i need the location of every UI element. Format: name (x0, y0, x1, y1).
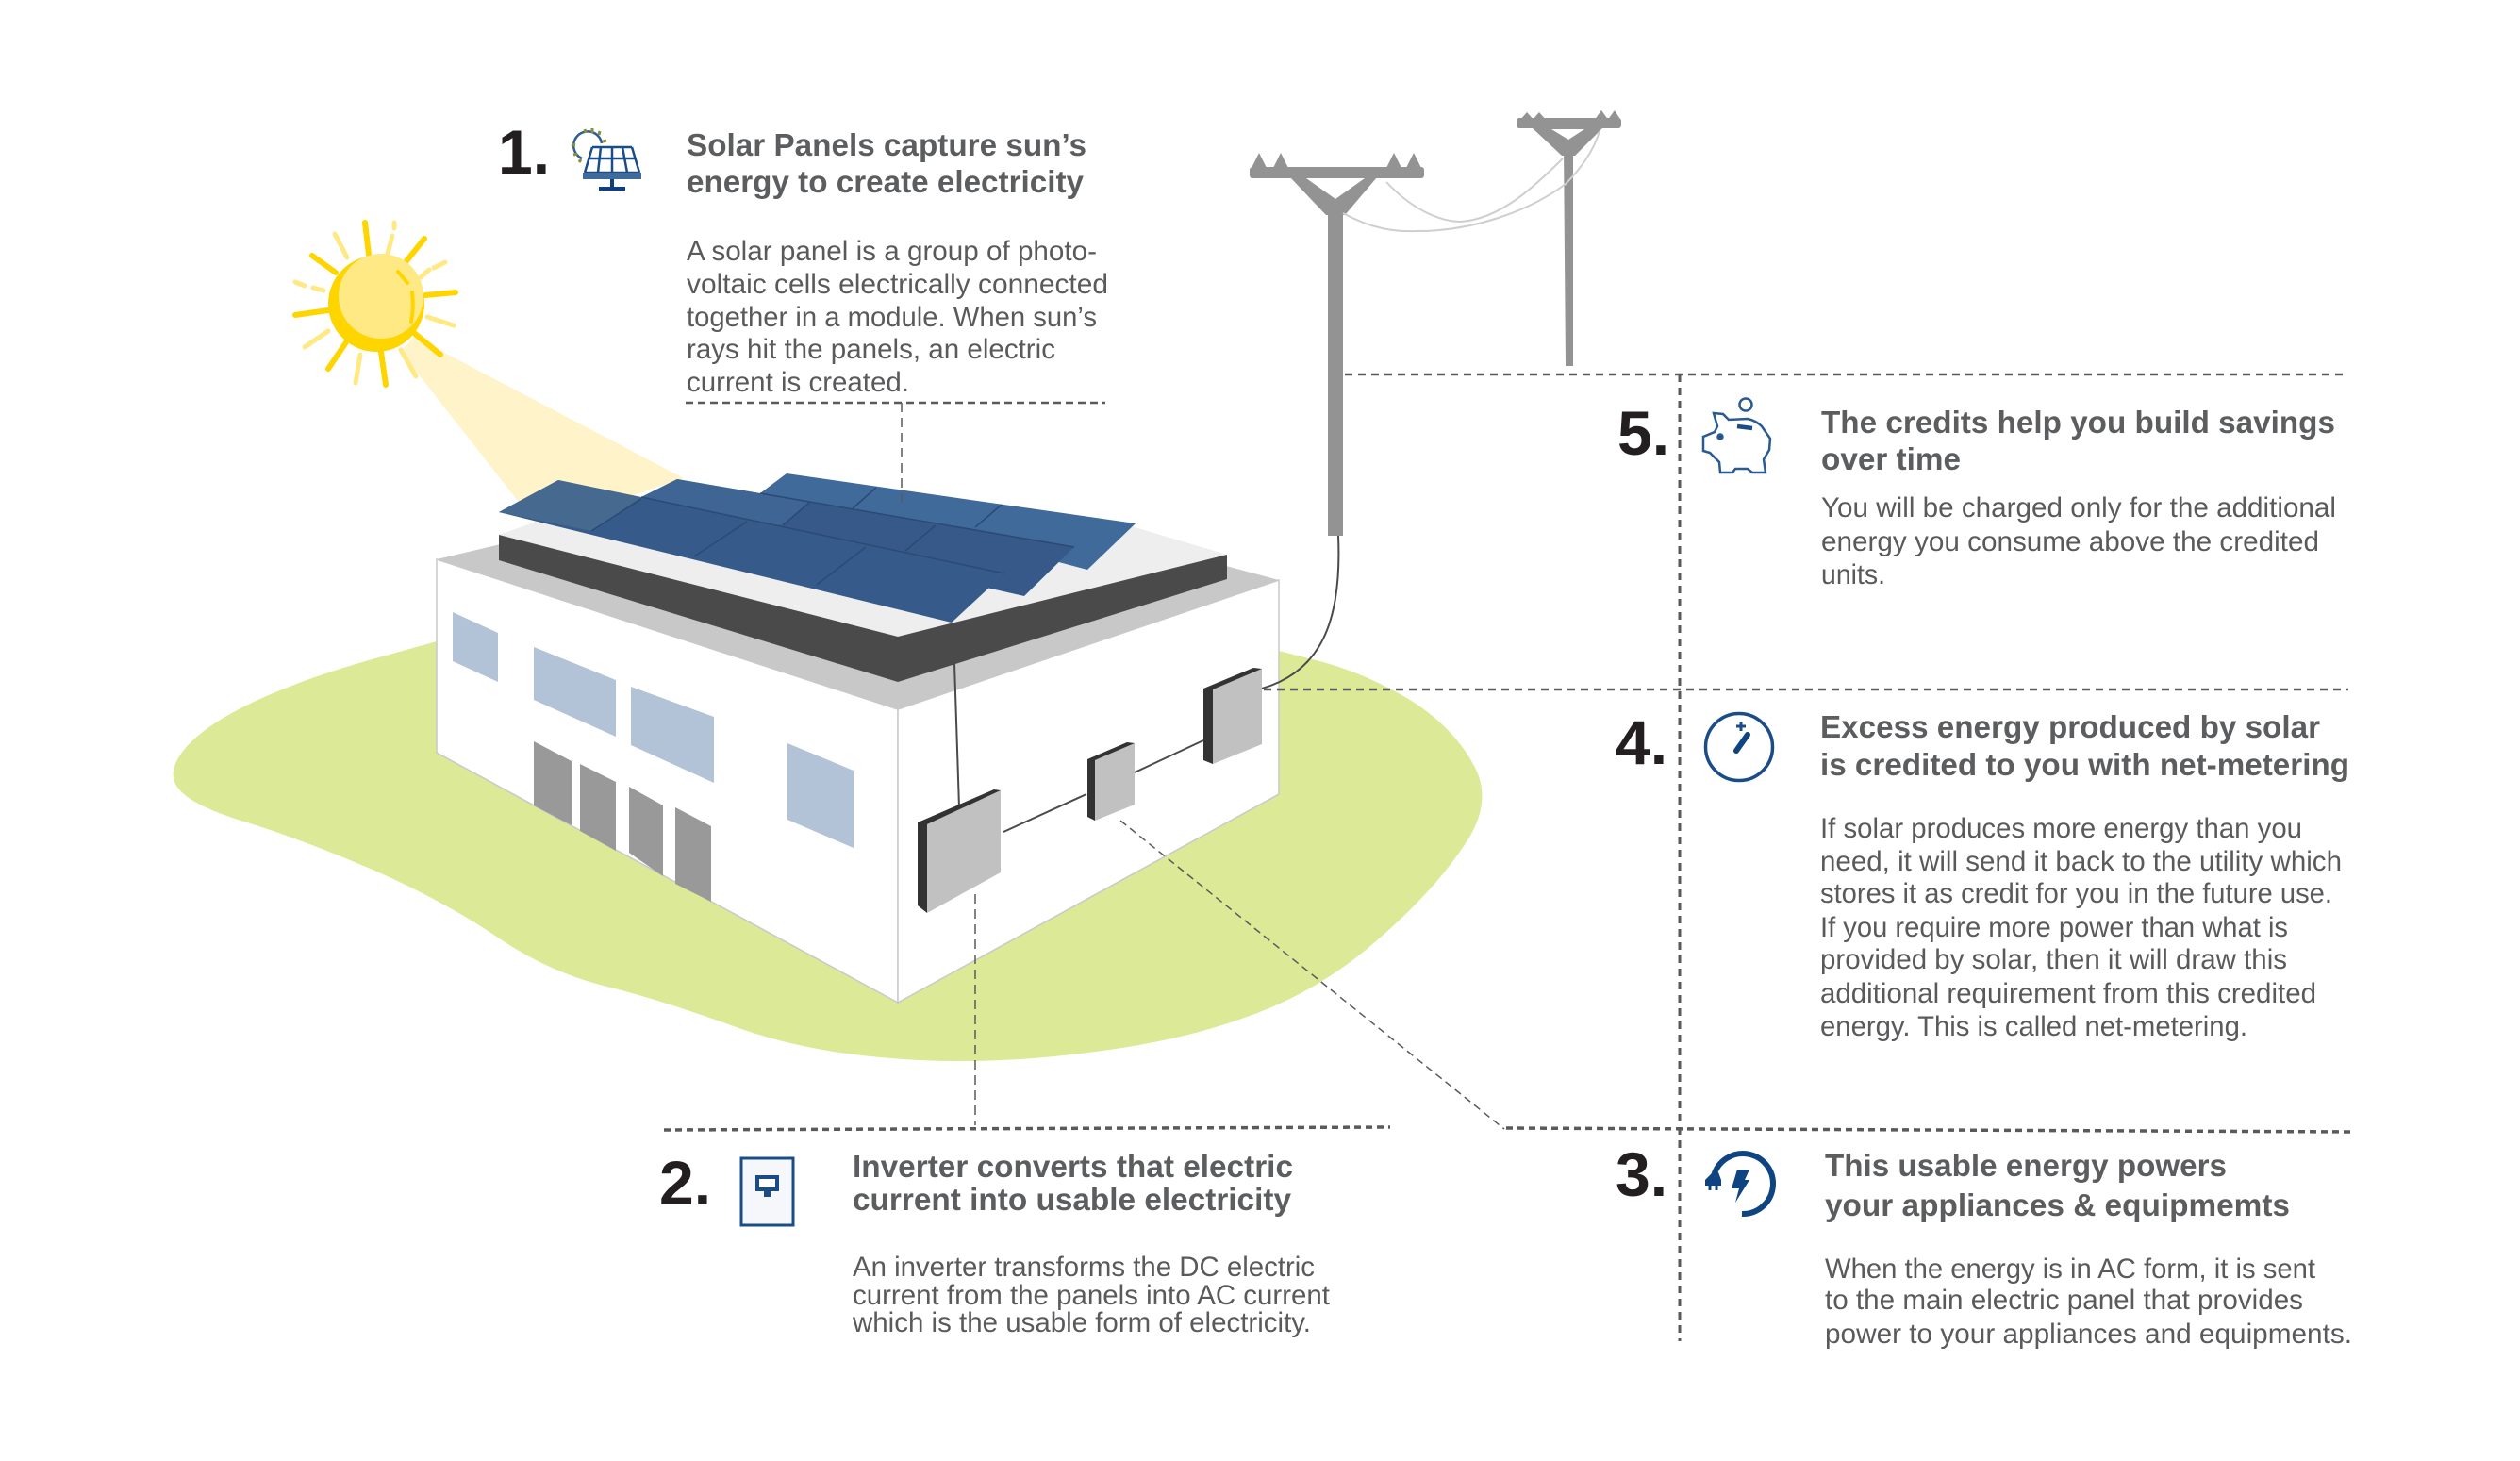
heading 1: energy to create electricity (687, 164, 1085, 199)
heading 3: your appliances & equipmemts (1825, 1187, 2290, 1222)
wiring between boxes (954, 536, 1338, 832)
body 3: When the energy is in AC form, it is sent (1825, 1253, 2316, 1285)
building (437, 505, 1279, 1003)
body 2: which is the usable form of electricity. (852, 1307, 1311, 1338)
sun (295, 223, 456, 385)
icon: inverter (741, 1158, 793, 1225)
body 1: current is created. (687, 367, 909, 398)
panel dividers (591, 488, 1074, 585)
body 1: voltaic cells electrically connected (687, 269, 1108, 300)
step 5 (1617, 398, 2336, 590)
body 4: additional requirement from this credited (1820, 978, 2316, 1009)
body 4 (1820, 813, 2342, 1042)
step 2 (659, 1148, 1331, 1338)
body 1: together in a module. When sun’s (687, 302, 1097, 333)
sun major rays (295, 223, 456, 385)
heading 3: This usable energy powers (1825, 1148, 2227, 1183)
faded panel corner (499, 480, 641, 531)
step 1 (498, 117, 1108, 398)
utility pole left (1250, 153, 1424, 536)
heading 4: Excess energy produced by solar (1820, 709, 2320, 744)
heading 4: is credited to you with net-metering (1820, 747, 2349, 782)
body 4: provided by solar, then it will draw this (1820, 944, 2287, 975)
step 3 (1616, 1139, 2352, 1350)
body 5 (1821, 492, 2336, 590)
sun pale rays (295, 223, 454, 383)
heading 3 (1825, 1148, 2290, 1222)
heading 5 (1821, 405, 2335, 476)
icon: piggy bank (1703, 398, 1770, 473)
body 1: rays hit the panels, an electric (687, 334, 1055, 365)
middle row first cell (641, 479, 809, 525)
icon: stopwatch (1705, 713, 1773, 781)
body 5: units. (1821, 559, 1885, 590)
heading 2: current into usable electricity (853, 1182, 1292, 1217)
body 1: A solar panel is a group of photo- (687, 236, 1097, 267)
grass ground blob (174, 641, 1482, 1061)
body 4: need, it will send it back to the utility which (1820, 846, 2342, 877)
number 4: 4. (1616, 707, 1667, 777)
back panel row (760, 473, 1136, 570)
body 5: You will be charged only for the additional (1821, 492, 2336, 523)
roof slab (437, 538, 1279, 709)
heading 5: over time (1821, 441, 1961, 476)
heading 4 (1820, 709, 2349, 782)
solar panels (499, 473, 1136, 623)
body 4: stores it as credit for you in the future use. (1820, 878, 2332, 909)
body 5: energy you consume above the credited (1821, 526, 2319, 557)
icon: plug with bolt (1705, 1154, 1773, 1214)
heading 1: Solar Panels capture sun’s (687, 127, 1086, 162)
heading 1 (687, 127, 1086, 199)
number 3: 3. (1616, 1139, 1667, 1209)
body 4: If you require more power than what is (1820, 912, 2288, 943)
middle panel row (641, 479, 1074, 596)
left wall (437, 559, 898, 1003)
roof parapet (499, 535, 1227, 682)
body 3 (1825, 1253, 2352, 1350)
heading 5: The credits help you build savings (1821, 405, 2335, 440)
meter box small (1087, 742, 1135, 821)
power lines (1343, 131, 1600, 231)
sun beam (401, 337, 684, 527)
body 3: power to your appliances and equipments. (1825, 1319, 2352, 1350)
windows (453, 612, 854, 848)
right wall (898, 580, 1279, 1003)
body 4: energy. This is called net-metering. (1820, 1011, 2247, 1042)
step 4 (1616, 707, 2349, 1042)
body 2 (852, 1252, 1331, 1338)
heading 2: Inverter converts that electric (853, 1149, 1293, 1184)
front panel row (499, 480, 1004, 623)
body 2: current from the panels into AC current (853, 1280, 1331, 1311)
icon: solar panel with sun (572, 128, 641, 189)
dashed leader lines (664, 374, 2353, 1341)
heading 2 (853, 1149, 1293, 1217)
number 2: 2. (659, 1148, 711, 1218)
panel box right (1203, 668, 1262, 764)
sun disc (328, 256, 424, 352)
number 1: 1. (498, 117, 550, 187)
roof surface (499, 505, 1227, 637)
body 2: An inverter transforms the DC electric (853, 1252, 1315, 1283)
inverter box large (918, 789, 1001, 913)
number 5: 5. (1617, 398, 1669, 468)
body 1 (687, 236, 1108, 398)
body 4: If solar produces more energy than you (1820, 813, 2302, 844)
utility pole right (1517, 110, 1621, 366)
doors (534, 741, 711, 902)
body 3: to the main electric panel that provides (1825, 1285, 2303, 1316)
